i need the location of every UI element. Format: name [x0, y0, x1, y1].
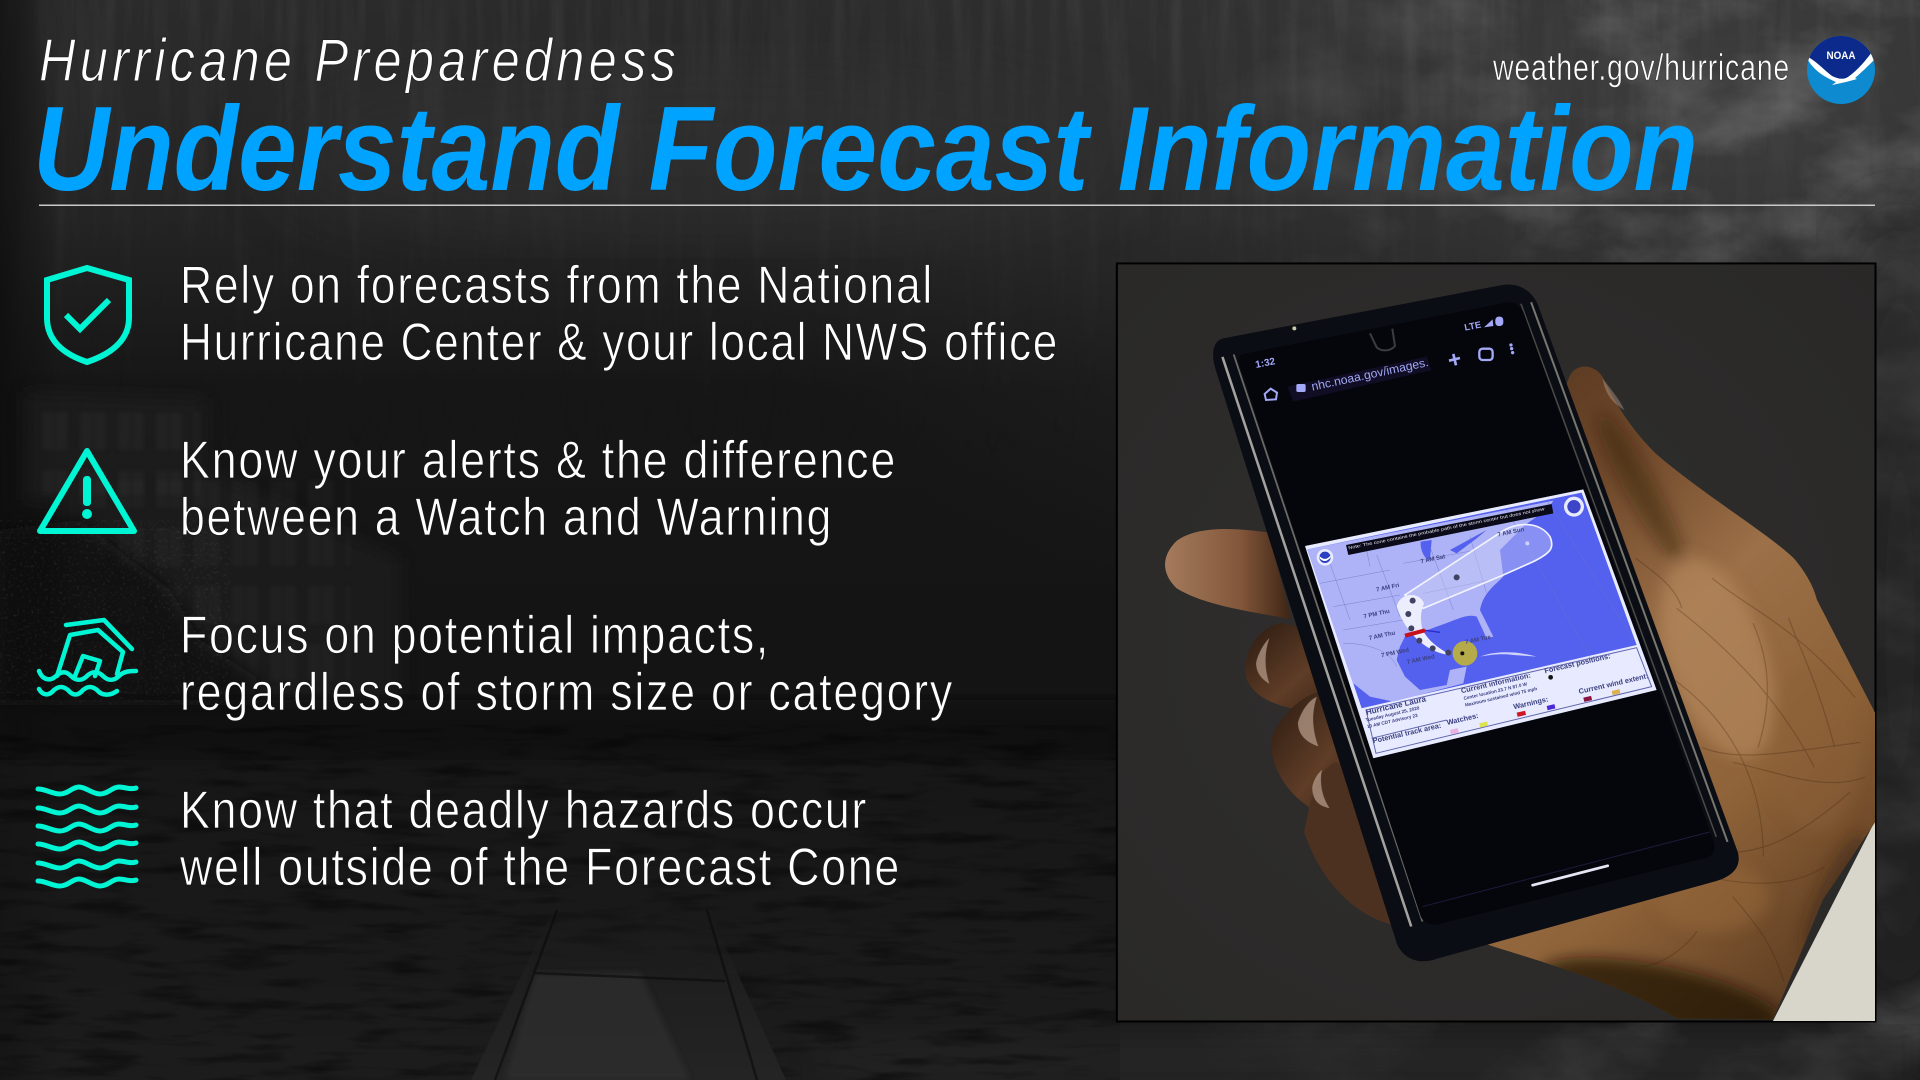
- forecast cone outline: [1405, 525, 1552, 608]
- time labels: [1363, 527, 1525, 666]
- time labels: 7 PM Wed: [1381, 647, 1410, 659]
- legend: Hurricane Laura: [1365, 694, 1427, 717]
- time labels: 7 AM Sat: [1420, 554, 1446, 565]
- icon: water waves: [38, 787, 136, 886]
- storm centre: [1453, 641, 1477, 666]
- panel: photo of hand holding phone: [1117, 263, 1877, 1050]
- url text: nhc.noaa.gov/images.: [1310, 355, 1430, 394]
- state lines: [1320, 500, 1633, 667]
- icon: warning triangle: [40, 451, 134, 531]
- road: [471, 893, 786, 1080]
- phone screen: [1239, 302, 1714, 925]
- map land: [1307, 501, 1553, 708]
- legend: Current information:: [1460, 670, 1532, 695]
- legend: Forecast positions:: [1543, 651, 1611, 675]
- time labels: 7 AM Sun: [1497, 527, 1525, 539]
- icon: NOAA logo: NOAA: [1826, 50, 1856, 62]
- time labels: 7 PM Thu: [1363, 609, 1391, 620]
- warning coast: [1405, 630, 1425, 636]
- time labels: 7 AM Tue: [1465, 635, 1492, 646]
- heading: Understand Forecast Information: Understand Forecast Information: [33, 82, 1698, 216]
- list item 3: impacts: [39, 606, 954, 722]
- hand: middle finger: [1245, 623, 1340, 709]
- cuba: [1480, 652, 1537, 657]
- time labels: 7 AM Thu: [1368, 630, 1396, 642]
- phone body: [1213, 285, 1739, 961]
- icon: flooded house: [39, 620, 136, 695]
- legend: Warnings:: [1512, 694, 1549, 711]
- camera dot: [1292, 326, 1296, 330]
- network status: LTE: [1463, 320, 1482, 333]
- nws map logo: [1564, 497, 1584, 517]
- flooded building: [0, 392, 400, 705]
- legend: 10 AM CDT Advisory 23: [1366, 713, 1419, 729]
- list item 4: hazards: [38, 781, 901, 897]
- map sea: [1307, 493, 1637, 708]
- phone status and browser bar: [1254, 317, 1514, 402]
- divider rule: [39, 204, 1875, 206]
- forecast points: [1405, 541, 1529, 656]
- website link: weather.gov/hurricane: [1492, 47, 1790, 88]
- map note box: [1346, 504, 1553, 555]
- legend: Potential track area:: [1372, 721, 1442, 745]
- map screenshot: Note: The cone contains the probable path of the storm center but does not show: [1348, 506, 1546, 550]
- map frame: [1305, 489, 1657, 758]
- map screenshot: [1305, 489, 1657, 758]
- lock: [1296, 384, 1306, 392]
- legend: [1365, 648, 1652, 753]
- forecast cone core: [1397, 595, 1450, 655]
- legend: Maximum sustained wind 75 mph: [1464, 686, 1538, 708]
- text: rely on forecasts: Hurricane Center & your local NWS office: [180, 313, 1059, 372]
- menu: [1509, 343, 1513, 347]
- text: alerts: Know your alerts & the difference: [180, 431, 897, 490]
- text: alerts: between a Watch and Warning: [180, 488, 833, 547]
- hand: palm and thumb: [1355, 367, 1877, 1050]
- hand: index finger: [1165, 529, 1291, 619]
- text: impacts: regardless of storm size or category: [180, 663, 954, 722]
- phone bezel highlights: [1222, 357, 1411, 926]
- legend: Tuesday August 25, 2020: [1365, 705, 1420, 723]
- clock: 1:32: [1254, 356, 1277, 371]
- lower screen edge: [1422, 832, 1710, 907]
- url bar: [1287, 357, 1432, 402]
- new tab plus: [1449, 354, 1460, 365]
- camera notch: [1370, 329, 1395, 350]
- hand: ring finger: [1271, 690, 1361, 807]
- text: hazards: Know that deadly hazards occur: [180, 781, 868, 840]
- home button: [1265, 389, 1277, 400]
- icon: NOAA logo: [1807, 36, 1875, 104]
- home indicator: [1533, 866, 1608, 885]
- list item 2: alerts: [40, 431, 897, 547]
- hand: little finger: [1304, 762, 1401, 926]
- legend: Center location 23.7 N 87.0 W: [1463, 681, 1528, 701]
- list item 1: rely on forecasts: [47, 256, 1059, 372]
- text: impacts: Focus on potential impacts,: [180, 606, 770, 665]
- icon: shield with check: [47, 268, 129, 362]
- text: rely on forecasts: Rely on forecasts from the National: [180, 256, 934, 315]
- time labels: 7 AM Fri: [1376, 583, 1400, 594]
- white sleeve: [1773, 821, 1875, 1021]
- text: hazards: well outside of the Forecast Cone: [179, 838, 901, 897]
- legend: Current wind extent:: [1578, 671, 1649, 696]
- tab switcher: [1479, 349, 1493, 360]
- hand: finger nails: [1256, 378, 1624, 808]
- noaa map logo: [1317, 549, 1333, 566]
- hand: shading: [1535, 407, 1877, 1050]
- phone: [1213, 285, 1739, 961]
- great lakes: [1421, 530, 1487, 560]
- hand: palm creases: [1636, 558, 1865, 981]
- legend: Watches:: [1446, 711, 1479, 727]
- title: Hurricane Preparedness: Hurricane Preparedness: [39, 27, 680, 94]
- time labels: 7 AM Wed: [1406, 654, 1436, 666]
